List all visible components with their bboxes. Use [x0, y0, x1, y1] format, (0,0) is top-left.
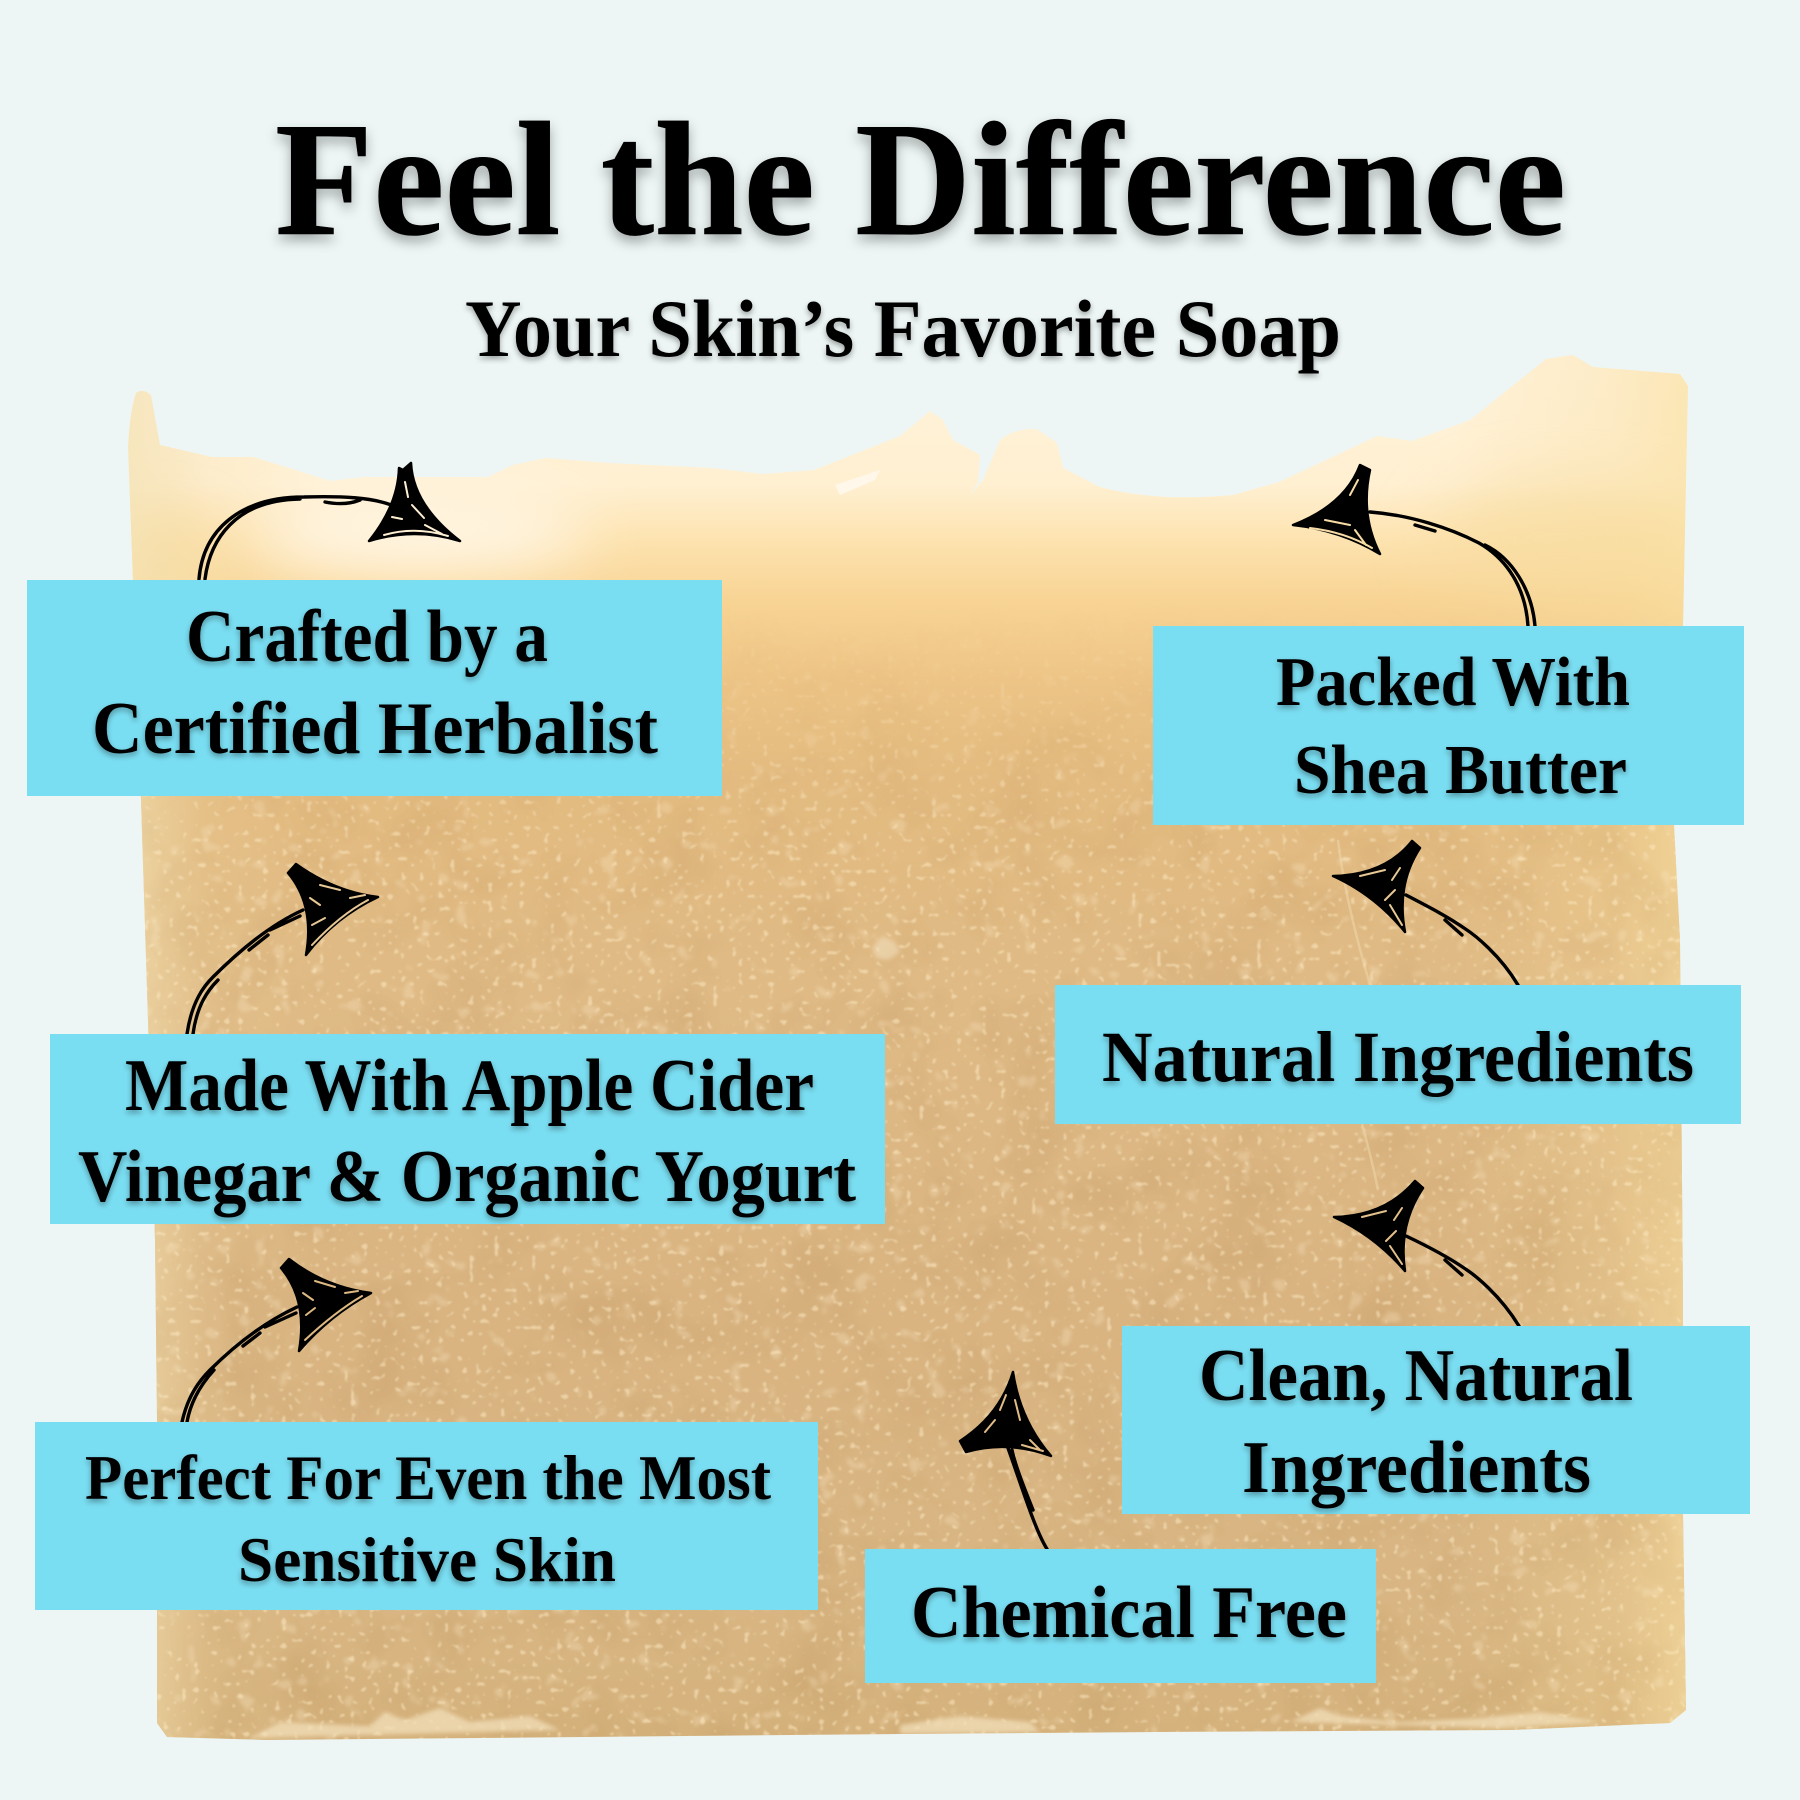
title: Feel the Difference — [275, 90, 1566, 270]
subtitle: Your Skin’s Favorite Soap — [465, 283, 1341, 374]
label: made with apple cider vinegar and organic yogurt: Vinegar & Organic Yogurt — [78, 1136, 856, 1218]
label: packed with shea butter — [1153, 626, 1744, 825]
arrow: clean natural ingredients — [1334, 1181, 1519, 1326]
arrow: crafted by a certified herbalist — [199, 463, 460, 579]
label: made with apple cider vinegar and organic yogurt: Made With Apple Cider — [125, 1045, 814, 1127]
label: clean natural ingredients — [1122, 1326, 1750, 1514]
label: packed with shea butter: Packed With — [1276, 644, 1630, 721]
arrow: packed with shea butter — [1293, 465, 1535, 626]
arrow: chemical free — [960, 1372, 1051, 1549]
label: perfect for even the most sensitive skin: Perfect For Even the Most — [85, 1443, 771, 1513]
label: chemical free — [865, 1549, 1376, 1683]
soap bar — [100, 340, 1720, 1750]
label: packed with shea butter: Shea Butter — [1294, 732, 1627, 809]
arrow: made with apple cider vinegar — [187, 864, 378, 1034]
label: clean natural ingredients: Ingredients — [1242, 1427, 1591, 1509]
label: clean natural ingredients: Clean, Natural — [1199, 1335, 1633, 1417]
label: perfect for even the most sensitive skin: Sensitive Skin — [238, 1525, 616, 1595]
label: natural ingredients — [1055, 985, 1741, 1124]
label: perfect for even the most sensitive skin — [35, 1422, 818, 1610]
arrow: natural ingredients — [1333, 841, 1518, 985]
label: crafted by a certified herbalist: Certified Herbalist — [92, 688, 658, 770]
label: crafted by a certified herbalist: Crafted by a — [186, 596, 548, 678]
label: made with apple cider vinegar and organic yogurt — [50, 1034, 885, 1224]
label: natural ingredients: Natural Ingredients — [1102, 1017, 1694, 1097]
label: chemical free: Chemical Free — [911, 1572, 1347, 1654]
label: crafted by a certified herbalist — [27, 580, 722, 796]
arrow: perfect for sensitive skin — [182, 1259, 371, 1422]
